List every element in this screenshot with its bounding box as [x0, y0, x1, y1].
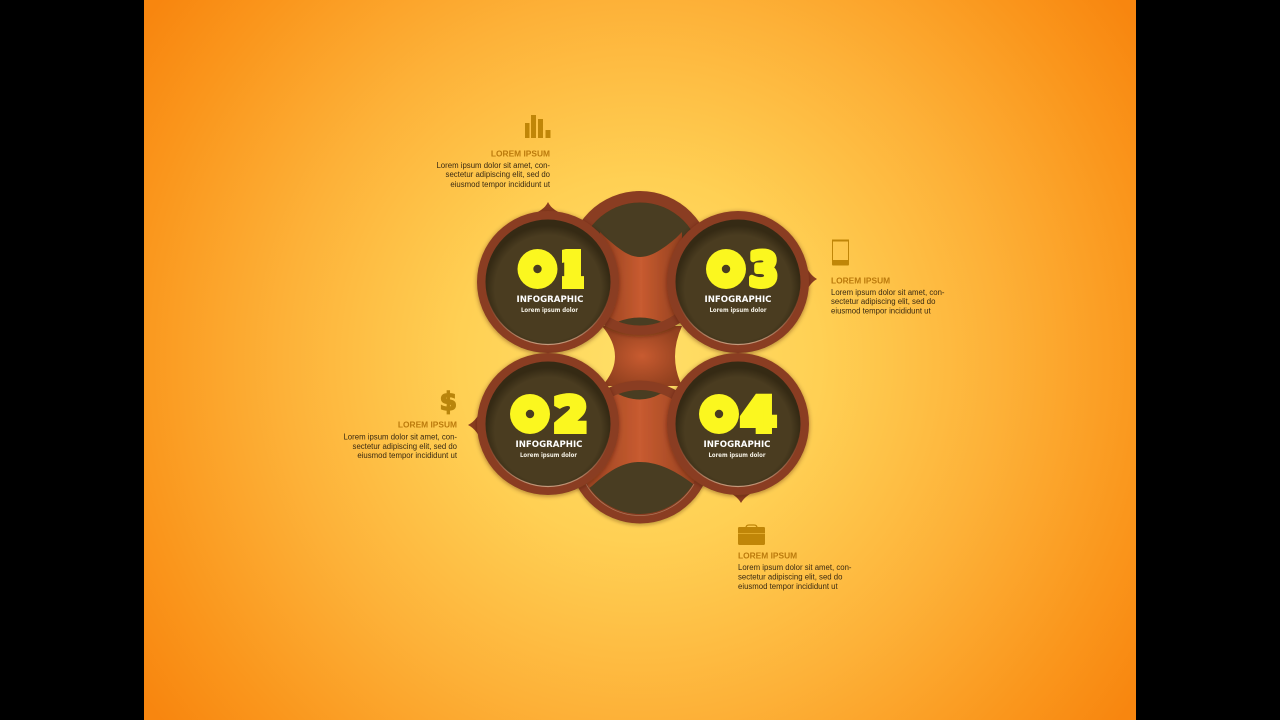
number 03: 0 [711, 245, 741, 296]
callout 02: sectetur adipiscing elit, sed do [353, 442, 458, 451]
number 02: 2 [554, 388, 587, 442]
callout 02 [343, 387, 458, 460]
circle 03: Lorem ipsum dolor [710, 306, 767, 314]
callout 02: LOREM IPSUM [398, 420, 457, 430]
circle 04 [667, 353, 809, 503]
circle 02: INFOGRAPHIC [516, 440, 583, 450]
callout 04: LOREM IPSUM [738, 550, 797, 560]
callout 01: Lorem ipsum dolor sit amet, con- [436, 161, 550, 170]
number 03 [706, 244, 778, 296]
circle 04: Lorem ipsum dolor [708, 451, 766, 459]
middle hourglass pipe [602, 326, 682, 386]
number 01: 1 [556, 244, 584, 296]
number 01: 0 [522, 245, 553, 296]
callout 04 [738, 525, 852, 591]
bottom copper pipe [586, 394, 695, 488]
bottom dark edge [586, 484, 694, 516]
callout 03: LOREM IPSUM [831, 276, 890, 286]
callout 01: sectetur adipiscing elit, sed do [446, 170, 551, 179]
callout 01: eiusmod tempor incididunt ut [450, 180, 551, 189]
pointer [528, 202, 568, 216]
callout 03: eiusmod tempor incididunt ut [831, 306, 932, 316]
callout 04: eiusmod tempor incididunt ut [738, 582, 839, 591]
callout 01: LOREM IPSUM [491, 148, 550, 158]
number 01 [518, 249, 584, 289]
number 02 [510, 388, 587, 442]
callout 03: Lorem ipsum dolor sit amet, con- [831, 288, 945, 297]
bottom hidden circle [568, 380, 712, 524]
circle 02: Lorem ipsum dolor [520, 451, 578, 459]
number 04: 4 [742, 388, 776, 442]
icon: bar chart [525, 115, 550, 138]
pointer [721, 489, 761, 503]
central connector diagram [568, 191, 712, 524]
circle 03 [667, 211, 817, 353]
pointer [803, 259, 817, 299]
callout 03: sectetur adipiscing elit, sed do [831, 297, 936, 306]
number 04: 0 [704, 390, 734, 441]
icon: briefcase [738, 525, 765, 545]
number 04 [699, 388, 776, 442]
circle 01 [477, 202, 619, 353]
callout 04: sectetur adipiscing elit, sed do [738, 572, 843, 582]
circle 01: INFOGRAPHIC [516, 295, 584, 305]
top copper pipe [600, 232, 682, 332]
callout 02: eiusmod tempor incididunt ut [357, 451, 458, 460]
circle 04: INFOGRAPHIC [704, 440, 771, 450]
number 03: 3 [749, 244, 778, 296]
circle 02 [468, 353, 619, 495]
background [144, 0, 1136, 720]
top hidden circle [582, 191, 700, 338]
callout 04: Lorem ipsum dolor sit amet, con- [738, 563, 852, 572]
icon: phone [832, 240, 849, 266]
circle 01: Lorem ipsum dolor [521, 306, 579, 314]
callout 01 [436, 115, 551, 189]
callout 02: Lorem ipsum dolor sit amet, con- [343, 432, 457, 442]
circle 03: INFOGRAPHIC [704, 295, 772, 305]
pointer [468, 405, 483, 445]
callout 03 [831, 240, 945, 316]
icon: dollar sign: $ [440, 387, 457, 416]
number 02: 0 [515, 390, 545, 441]
